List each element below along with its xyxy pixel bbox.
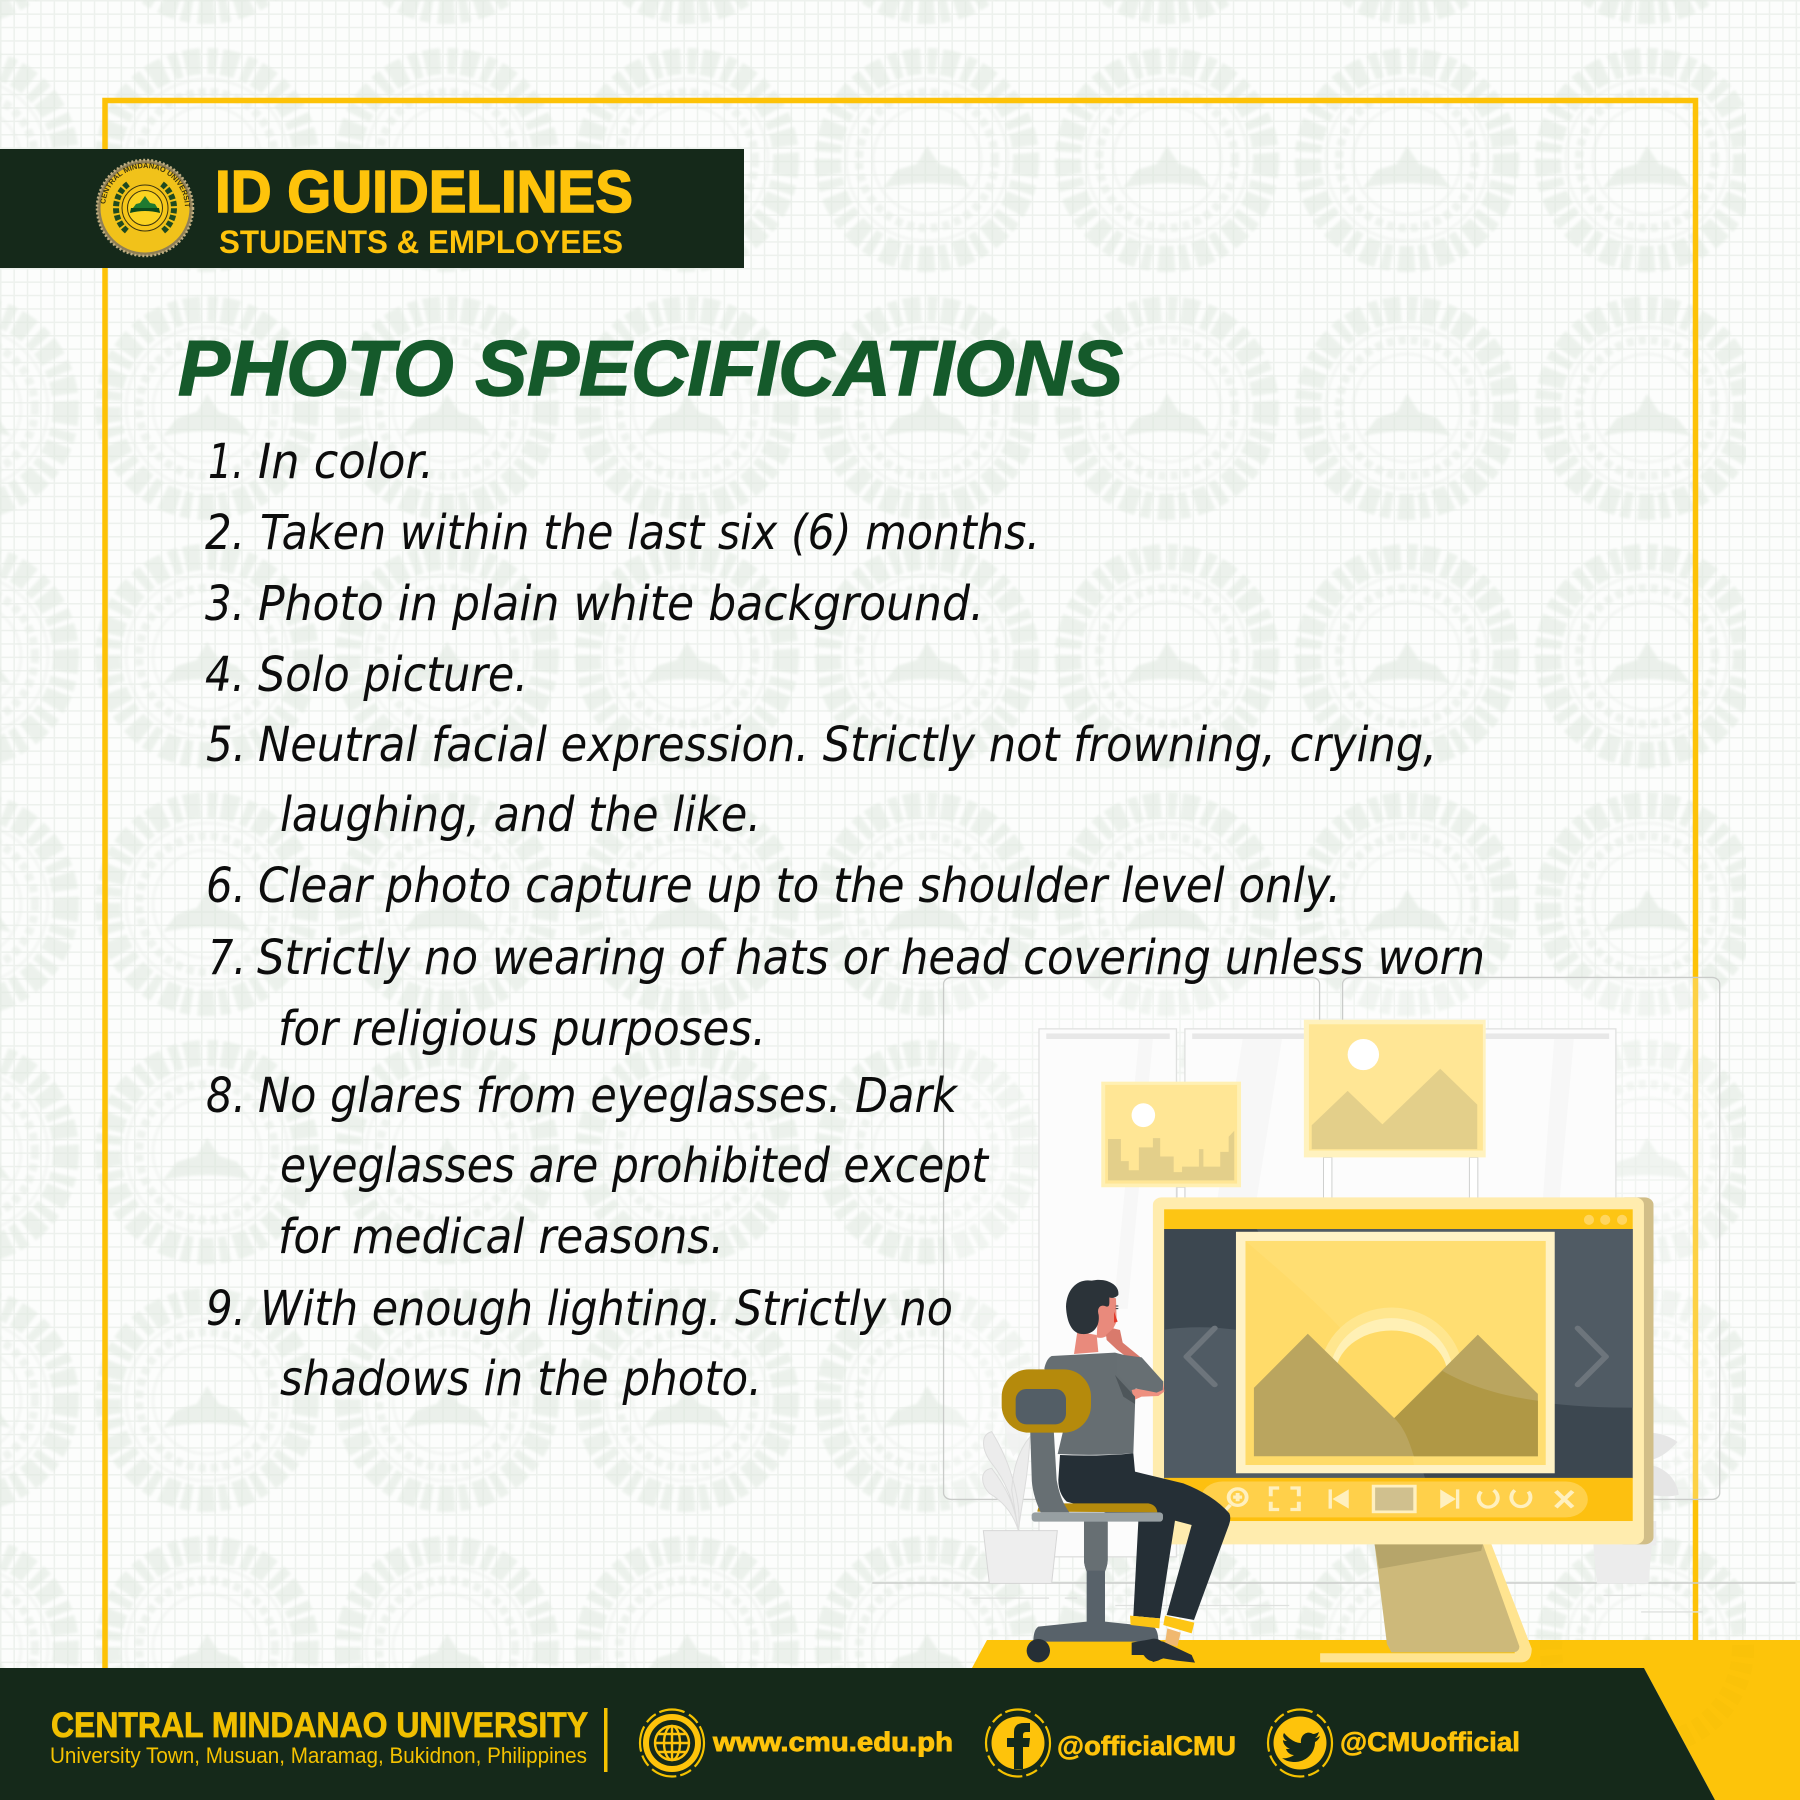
- specification list: Solo picture.: [258, 647, 528, 703]
- university address: University Town, Musuan, Maramag, Bukidnon, Philippines: [50, 1743, 587, 1768]
- chair back and seat: [1002, 1369, 1163, 1522]
- specification list: Strictly no wearing of hats or head covering unless worn: [257, 930, 1485, 986]
- icon: globe: [640, 1710, 704, 1776]
- cuffs, ankle, shoes: [1130, 1616, 1195, 1663]
- chair base and column: [1027, 1522, 1165, 1662]
- specification list: 9.: [206, 1281, 246, 1337]
- icon: twitter: [1268, 1710, 1332, 1776]
- specification list: 8.: [206, 1068, 246, 1124]
- specification list: eyeglasses are prohibited except: [280, 1138, 990, 1194]
- screen: [1164, 1229, 1633, 1478]
- banner title: ID GUIDELINES: [215, 159, 633, 225]
- control bar: [1164, 1478, 1633, 1521]
- neck and face: [1074, 1297, 1118, 1354]
- illustration: person viewing photo on monitor: [872, 977, 1795, 1663]
- specification list: Photo in plain white background.: [258, 576, 984, 632]
- website: www.cmu.edu.ph: [712, 1727, 953, 1757]
- yellow frame border: [105, 100, 1696, 1668]
- person on office chair: [1002, 1280, 1230, 1663]
- room backdrop: panels, window, floor, plants: [872, 977, 1795, 1612]
- specification list: laughing, and the like.: [280, 787, 761, 843]
- divider: [604, 1708, 608, 1772]
- left plant: [983, 1407, 1057, 1583]
- twitter handle: @CMUofficial: [1340, 1727, 1520, 1757]
- specification list: Clear photo capture up to the shoulder level only.: [258, 858, 1341, 914]
- specification list: 2.: [205, 505, 245, 561]
- specification list: Taken within the last six (6) months.: [260, 505, 1040, 561]
- icon: facebook: [986, 1710, 1050, 1776]
- torso: [1044, 1353, 1137, 1455]
- main photo: [1236, 1232, 1555, 1473]
- hair: [1066, 1280, 1118, 1334]
- specification list: 5.: [206, 717, 246, 773]
- arm and hand: [1106, 1328, 1164, 1404]
- university name: CENTRAL MINDANAO UNIVERSITY: [51, 1706, 588, 1745]
- specification list: 6.: [206, 858, 246, 914]
- footer bar: [0, 1668, 1715, 1800]
- specification list: Neutral facial expression. Strictly not frowning, crying,: [258, 717, 1437, 773]
- specification list: No glares from eyeglasses. Dark: [258, 1068, 959, 1124]
- specification list: shadows in the photo.: [280, 1351, 762, 1407]
- specification list: With enough lighting. Strictly no: [260, 1281, 953, 1337]
- monitor stand: [1320, 1544, 1532, 1662]
- picture: large mountain card: [1304, 1020, 1486, 1157]
- specification list: for religious purposes.: [278, 1001, 766, 1057]
- picture: small skyline card: [1101, 1082, 1241, 1187]
- header banner: [0, 149, 744, 268]
- specification list: for medical reasons.: [278, 1209, 724, 1265]
- specification list: 3.: [205, 576, 245, 632]
- icon: university seal: [96, 158, 194, 258]
- monitor: [1153, 1197, 1653, 1662]
- yellow ground band: [972, 1552, 1800, 1800]
- heading: PHOTO SPECIFICATIONS: [178, 324, 1123, 412]
- specification list: [205, 434, 1485, 1407]
- banner subtitle: STUDENTS & EMPLOYEES: [219, 224, 623, 260]
- carousel arrows: [1187, 1328, 1215, 1385]
- specification list: 4.: [205, 647, 245, 703]
- specification list: 7.: [208, 930, 246, 986]
- specification list: In color.: [258, 434, 434, 490]
- trousers: [1058, 1453, 1230, 1620]
- specification list: 1.: [208, 434, 244, 490]
- facebook handle: @officialCMU: [1057, 1731, 1236, 1761]
